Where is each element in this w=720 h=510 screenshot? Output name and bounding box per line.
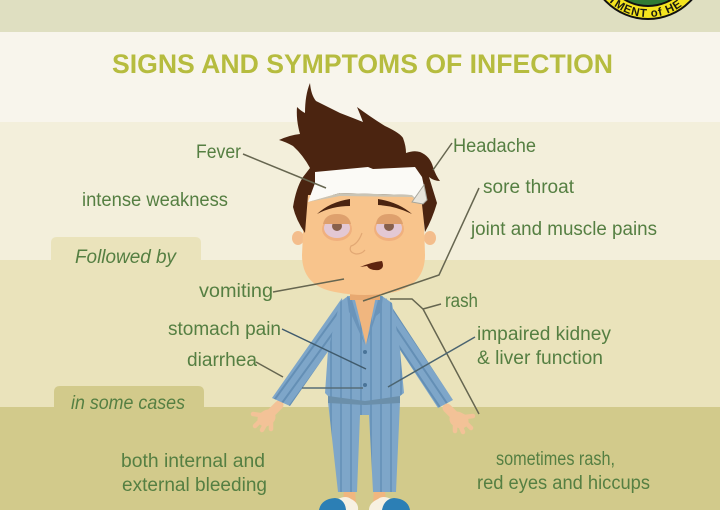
- label: bleeding: [121, 451, 267, 496]
- label: stomach pain: stomach pain: [168, 319, 281, 340]
- left hand: [253, 405, 279, 430]
- legs and ankles: [328, 402, 400, 504]
- label: vomiting: vomiting: [199, 281, 273, 302]
- label: rash, red eyes and hiccups: sometimes rash,: [496, 449, 615, 470]
- eyebrows: [317, 199, 350, 214]
- character: sick man: [253, 83, 473, 510]
- title: SIGNS AND SYMPTOMS OF INFECTION: [112, 49, 613, 79]
- label: intense weakness: intense weakness: [82, 190, 228, 211]
- head bandage: [308, 167, 427, 204]
- hair: [279, 83, 440, 233]
- neck: [350, 285, 380, 300]
- tab: followed by: [51, 237, 201, 260]
- label: headache: Headache: [453, 136, 536, 157]
- label: bleeding: both internal and: [121, 451, 265, 472]
- right hand: [447, 408, 473, 432]
- label: sore throat: sore throat: [483, 177, 575, 198]
- heading: followed by: Followed by: [75, 247, 177, 268]
- label: rash, red eyes and hiccups: red eyes and hiccups: [477, 473, 650, 494]
- head: [279, 83, 440, 300]
- heading: in some cases: in some cases: [71, 393, 185, 414]
- right shoe: [369, 497, 410, 510]
- label: bleeding: external bleeding: [122, 475, 267, 496]
- label: fever: Fever: [196, 142, 242, 163]
- label: impaired kidney and liver function: impaired kidney: [477, 324, 611, 345]
- callout lines: [243, 143, 479, 414]
- tab: in some cases: [54, 386, 204, 407]
- pyjama shirt: [325, 296, 404, 405]
- label: impaired kidney and liver function: & liver function: [477, 348, 603, 369]
- left shoe: [319, 497, 358, 510]
- nose: [350, 233, 365, 254]
- pyjama sleeves: [272, 298, 345, 406]
- left eye: [322, 214, 352, 241]
- label: joint and muscle pains: joint and muscle pains: [470, 219, 657, 240]
- label: impaired kidney and liver function: [477, 324, 611, 369]
- mouth: [360, 261, 383, 270]
- label: rash: rash: [445, 291, 478, 312]
- label: diarrhea: diarrhea: [187, 350, 257, 371]
- right eye: [374, 214, 404, 241]
- label: rash, red eyes and hiccups: [477, 449, 650, 494]
- face: [302, 190, 425, 295]
